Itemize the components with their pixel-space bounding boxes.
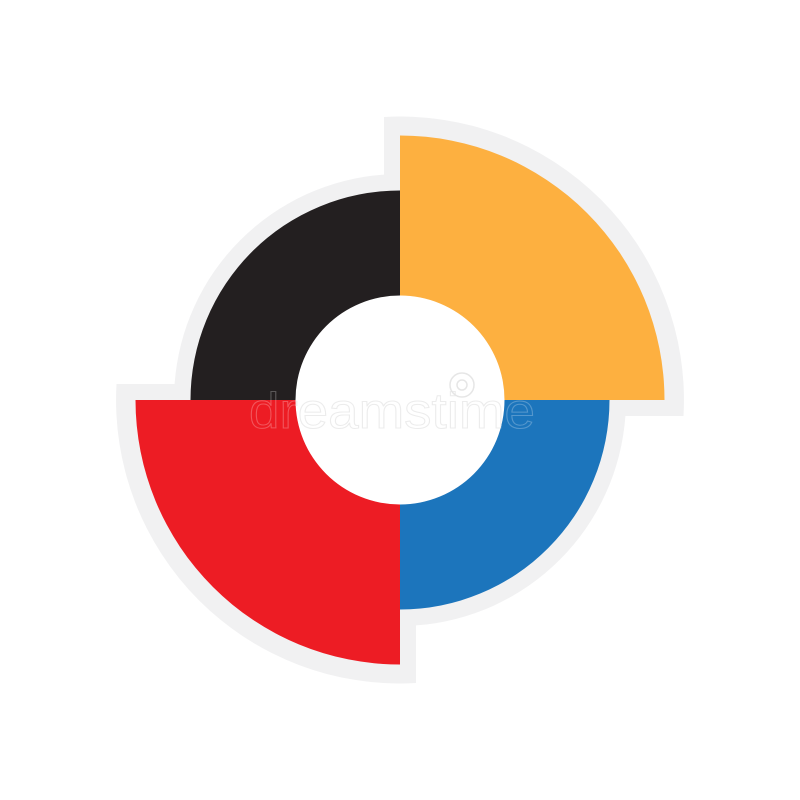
watermark xyxy=(250,372,534,429)
segment: orange top-right xyxy=(400,136,664,400)
infographic: four-segment pinwheel ring xyxy=(116,116,684,684)
watermark: dreamstime xyxy=(249,383,535,439)
segment: red bottom-left xyxy=(136,400,400,664)
segment: blue bottom-right xyxy=(400,400,610,610)
watermark: dreamstime xyxy=(249,383,535,439)
halo: light grey sticker outline xyxy=(116,117,684,683)
centre hole: white circle xyxy=(296,296,504,504)
segment: black top-left xyxy=(190,190,400,400)
